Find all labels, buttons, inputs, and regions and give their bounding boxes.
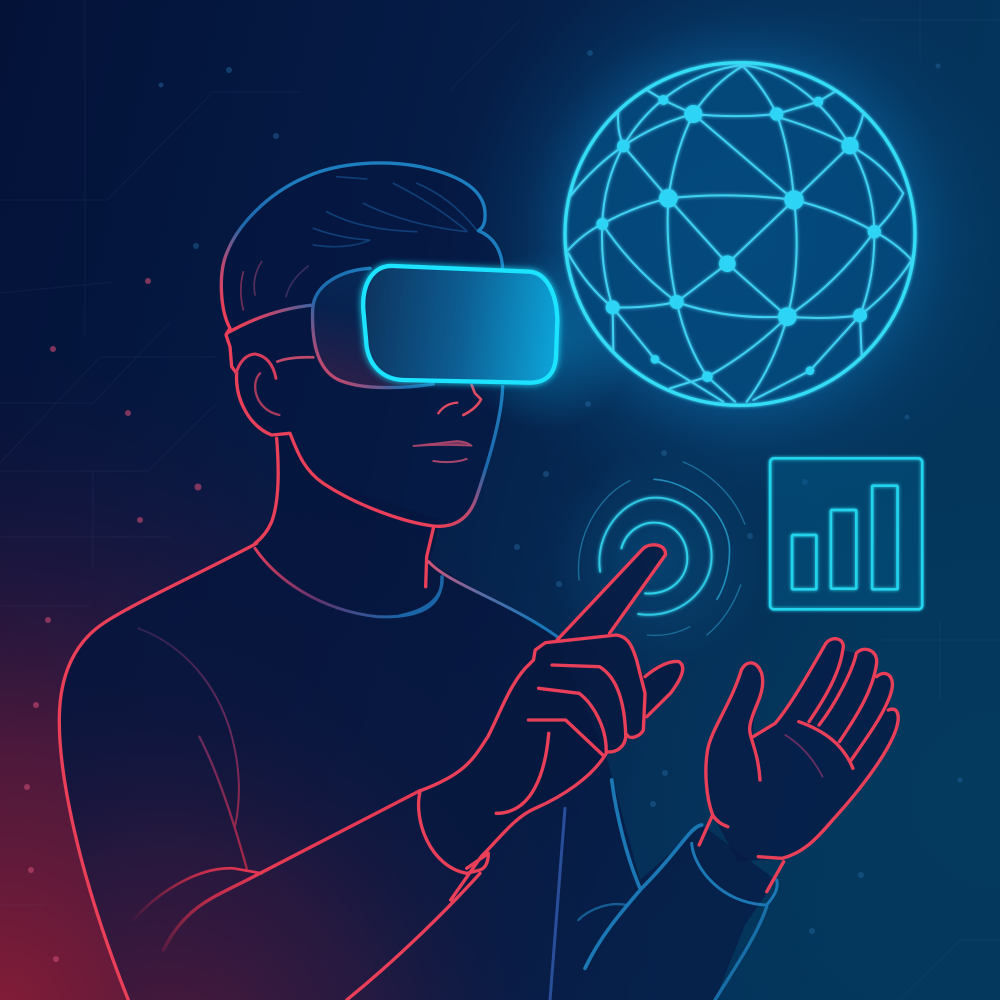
network globe xyxy=(565,63,915,405)
headset rear shell xyxy=(313,268,433,388)
globe halo fill xyxy=(565,63,915,405)
pointing hand xyxy=(419,545,683,900)
VR headset front visor xyxy=(363,266,557,383)
bar chart panel xyxy=(770,458,922,609)
hair strands xyxy=(241,177,477,310)
fist outline xyxy=(420,635,683,900)
red glow over lower body xyxy=(59,680,560,1000)
hair and face outline xyxy=(221,163,503,543)
chart bars xyxy=(792,486,898,589)
globe nodes xyxy=(596,95,881,382)
nose and mouth xyxy=(413,385,481,462)
goggle halo xyxy=(440,240,650,430)
pointing-arm cuff xyxy=(419,792,488,873)
open hand xyxy=(699,639,898,892)
right shoulder and sleeve outlines xyxy=(550,780,777,1000)
fingers and palm lines xyxy=(699,639,898,892)
globe mesh lines xyxy=(568,65,912,402)
touch ripple glow xyxy=(545,450,765,670)
person body silhouette fill xyxy=(59,435,776,1000)
head xyxy=(221,163,503,543)
body outline xyxy=(59,528,480,1000)
chart frame xyxy=(770,458,922,609)
globe outer ring xyxy=(565,63,915,405)
right shoulder line and collar hook xyxy=(400,562,557,637)
pointing finger xyxy=(557,545,665,640)
ear xyxy=(236,354,313,415)
touch ripple rings xyxy=(578,462,745,635)
